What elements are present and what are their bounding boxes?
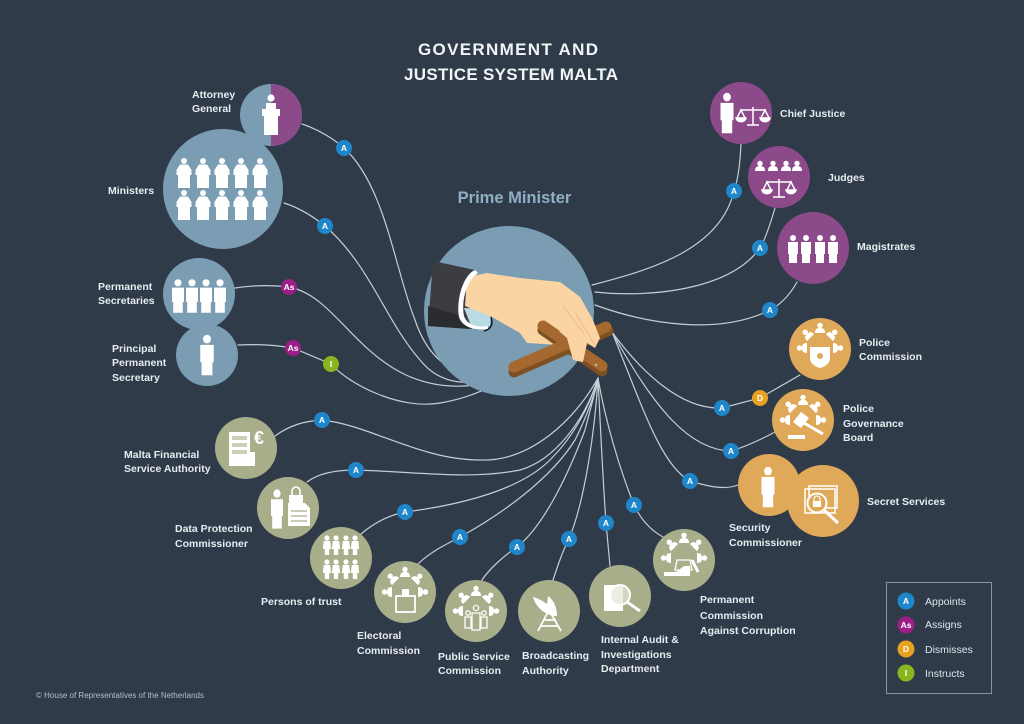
icon: principal permanent secretary: [176, 324, 238, 386]
label: permanent secretaries: Permanent: [98, 281, 153, 293]
icon: security commissioner: [738, 454, 800, 516]
badges: A: [457, 532, 463, 542]
legend: Dismisses: [925, 644, 973, 656]
label: broadcasting authority: Broadcasting: [522, 650, 589, 662]
badges: A: [731, 186, 737, 196]
badges: A: [319, 415, 325, 425]
label: chief justice: Chief Justice: [780, 108, 846, 120]
icon: judges: [748, 146, 810, 208]
label: attorney general: General: [192, 103, 231, 115]
badges: A: [757, 243, 763, 253]
icon: police commission: [789, 318, 851, 380]
label: permanent commission against corruption: Commission: [700, 610, 763, 622]
label: permanent secretaries: Secretaries: [98, 295, 155, 307]
icon: permanent secretaries: [163, 258, 235, 330]
label: principal permanent secretary: Principal: [112, 343, 156, 355]
badges: A: [514, 542, 520, 552]
badges: A: [402, 507, 408, 517]
icon: magistrates: [777, 212, 849, 284]
badges: A: [767, 305, 773, 315]
icon: data protection commissioner: [257, 477, 319, 539]
icon: malta financial service authority: [215, 417, 277, 479]
label: permanent commission against corruption: Permanent: [700, 594, 755, 606]
badges: I: [330, 359, 332, 369]
label: secret services: Secret Services: [867, 496, 945, 508]
badges: A: [719, 403, 725, 413]
legend: Assigns: [925, 619, 962, 631]
badges: A: [353, 465, 359, 475]
icon: public service commission: [445, 580, 507, 642]
legend: Appoints: [925, 596, 966, 608]
prime minister label: Prime Minister: [458, 189, 572, 207]
title: GOVERNMENT AND: [418, 40, 598, 59]
label: persons of trust: Persons of trust: [261, 596, 342, 608]
icon: police governance board: [772, 389, 834, 451]
cross: [514, 326, 608, 372]
title: JUSTICE SYSTEM MALTA: [404, 65, 618, 84]
label: malta financial service authority: Malta Financial: [124, 449, 199, 461]
icon: broadcasting authority: [518, 580, 580, 642]
connector lines: [235, 124, 800, 580]
badges: D: [757, 393, 763, 403]
label: electoral commission: Electoral: [357, 630, 401, 642]
badges: A: [687, 476, 693, 486]
fingers: [545, 282, 600, 362]
legend: A: [903, 596, 909, 606]
label: public service commission: Public Service: [438, 651, 510, 663]
badges: A: [631, 500, 637, 510]
label: malta financial service authority: Service Authority: [124, 463, 211, 475]
badges: A: [603, 518, 609, 528]
badges: A: [728, 446, 734, 456]
label: data protection commissioner: Commissioner: [175, 538, 248, 550]
badges: A: [341, 143, 347, 153]
badges: As: [284, 282, 295, 292]
label: police commission: Commission: [859, 351, 922, 363]
label: internal audit and investigations department: Investigations: [601, 649, 672, 661]
label: police commission: Police: [859, 337, 890, 349]
icon: ministers: [163, 129, 283, 249]
legend: I: [905, 668, 907, 678]
label: public service commission: Commission: [438, 665, 501, 677]
label: attorney general: Attorney: [192, 89, 235, 101]
label: police governance board: Police: [843, 403, 874, 415]
label: principal permanent secretary: Secretary: [112, 372, 160, 384]
label: magistrates: Magistrates: [857, 241, 916, 253]
icon: persons of trust: [310, 527, 372, 589]
icon: internal audit and investigations department: [589, 565, 651, 627]
label: electoral commission: Commission: [357, 645, 420, 657]
label: security commissioner: Commissioner: [729, 537, 802, 549]
icon: electoral commission: [374, 561, 436, 623]
label: data protection commissioner: Data Protection: [175, 523, 253, 535]
badges: A: [566, 534, 572, 544]
badges: As: [288, 343, 299, 353]
icon: secret services: [787, 465, 859, 537]
label: internal audit and investigations department: Department: [601, 663, 660, 675]
label: police governance board: Board: [843, 432, 873, 444]
footer credit: © House of Representatives of the Netherlands: [36, 691, 204, 700]
legend: As: [901, 620, 912, 630]
label: judges: Judges: [828, 172, 865, 184]
label: ministers: Ministers: [108, 185, 154, 197]
title: [404, 40, 618, 84]
icon: malta financial service authority: €: [254, 428, 264, 448]
label: security commissioner: Security: [729, 522, 771, 534]
label: internal audit and investigations department: Internal Audit &: [601, 634, 679, 646]
legend: [886, 582, 992, 694]
legend: Instructs: [925, 668, 965, 680]
label: police governance board: Governance: [843, 418, 904, 430]
prime minister hand illustration: [424, 226, 608, 396]
legend: D: [903, 644, 909, 654]
badges: [281, 140, 778, 555]
icon: permanent commission against corruption: [653, 529, 715, 591]
label: principal permanent secretary: Permanent: [112, 357, 167, 369]
label: permanent commission against corruption: Against Corruption: [700, 625, 796, 637]
icon: attorney general: [240, 84, 302, 146]
label: broadcasting authority: Authority: [522, 665, 569, 677]
icon: chief justice: [710, 82, 772, 144]
badges: A: [322, 221, 328, 231]
